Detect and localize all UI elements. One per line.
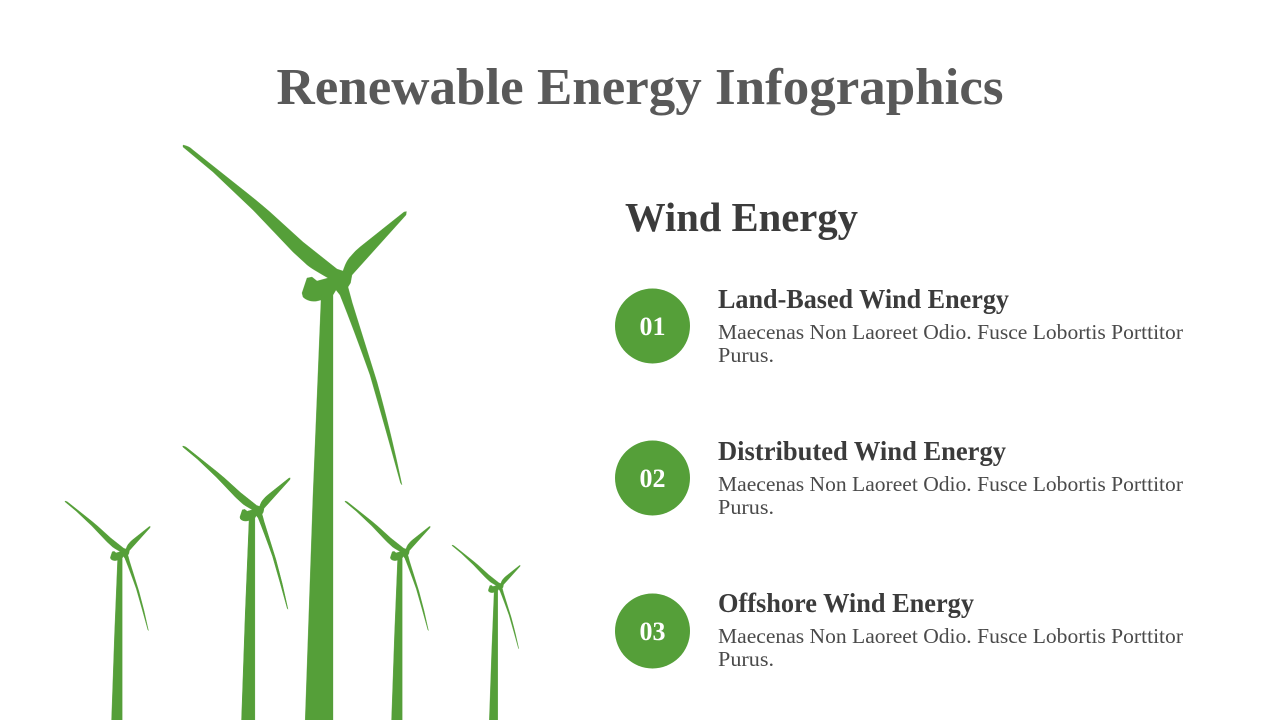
item description 03: Maecenas Non Laoreet Odio. Fusce Lobortis Porttitor (718, 624, 1183, 648)
item heading 02: Distributed Wind Energy (718, 436, 1006, 466)
number badge 02 (615, 440, 690, 516)
number badge 03 (615, 594, 690, 668)
icon: wind turbine, far left (65, 501, 150, 720)
section heading: Wind Energy (625, 194, 858, 240)
title: Renewable Energy Infographics (276, 59, 1004, 116)
item description 03: Purus. (718, 647, 774, 671)
item heading 03: Offshore Wind Energy (718, 588, 974, 618)
list item 03 (615, 588, 1183, 671)
item description 02: Purus. (718, 495, 774, 519)
icon: wind turbine, mid left (183, 446, 290, 720)
list item 02 (615, 436, 1183, 519)
item description 01: Purus. (718, 343, 774, 367)
illustration: wind turbines (65, 145, 520, 720)
icon: wind turbine, mid right (345, 501, 430, 720)
number badge 02: 02 (640, 464, 666, 493)
number badge 01 (615, 288, 690, 364)
number badge 01: 01 (640, 312, 666, 341)
icon: wind turbine, far right (452, 545, 520, 720)
item heading 01: Land-Based Wind Energy (718, 284, 1009, 314)
item description 01: Maecenas Non Laoreet Odio. Fusce Lobortis Porttitor (718, 320, 1183, 344)
number badge 03: 03 (640, 617, 666, 646)
item description 02: Maecenas Non Laoreet Odio. Fusce Lobortis Porttitor (718, 472, 1183, 496)
list item 01 (615, 284, 1183, 367)
icon: large central wind turbine (183, 145, 406, 720)
